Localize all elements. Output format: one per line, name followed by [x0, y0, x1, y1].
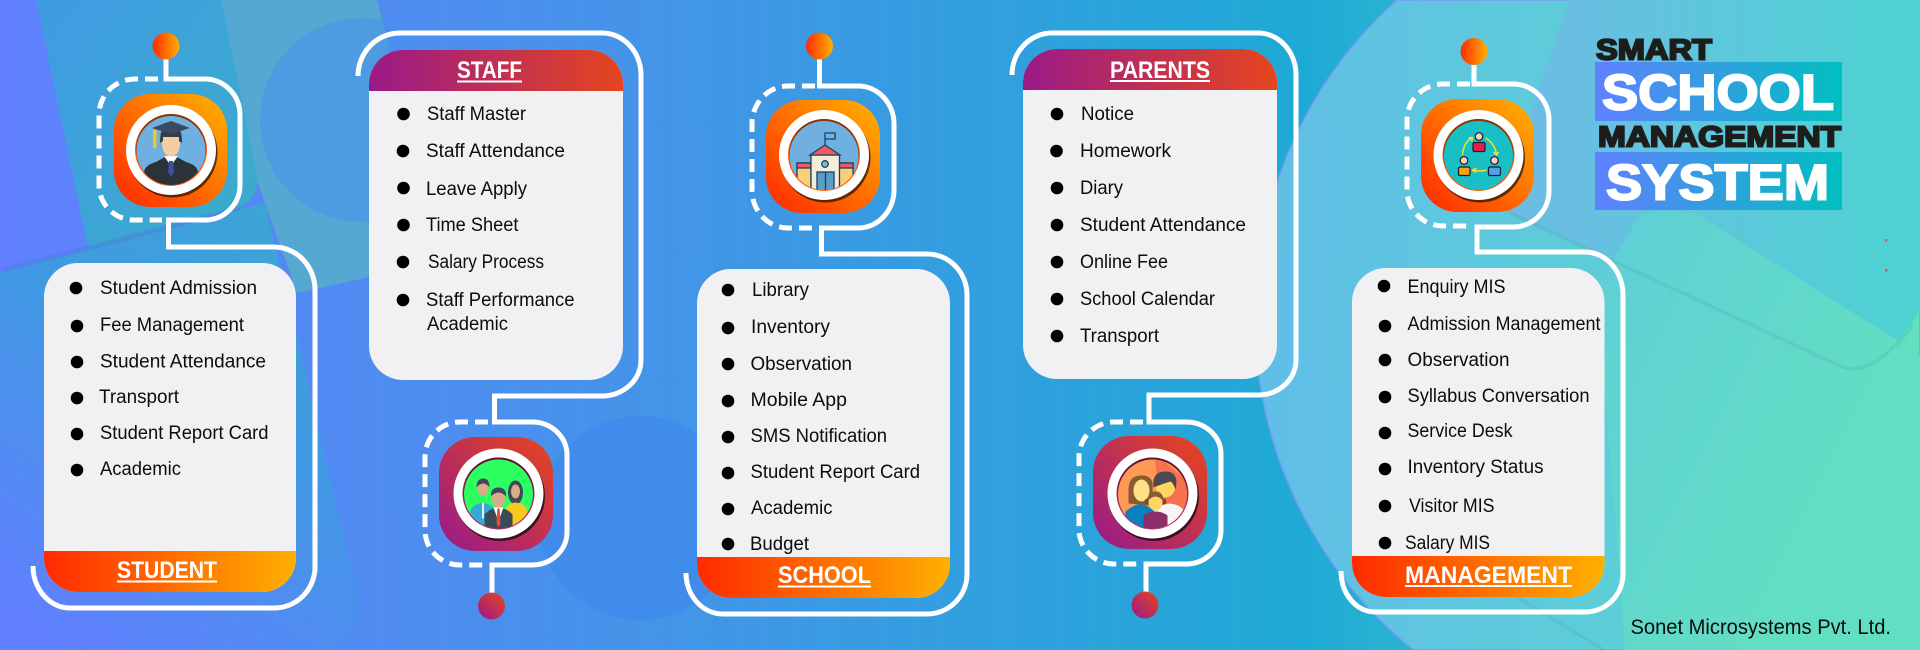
connector dot: management: [1460, 38, 1488, 65]
list: school: Library: [752, 280, 809, 301]
list: student: Transport: [99, 387, 180, 408]
icon: parents family: [1093, 436, 1207, 549]
list: parents: School Calendar: [1080, 289, 1216, 310]
connector: staff: [358, 33, 641, 600]
panel: management: [1341, 38, 1623, 612]
list: staff: Academic: [427, 314, 508, 335]
list: school: Inventory: [751, 317, 831, 338]
credit text: Sonet Microsystems Pvt. Ltd.: [1630, 616, 1891, 639]
list: management: Service Desk: [1408, 421, 1513, 442]
connector: parents: [1012, 33, 1296, 600]
title: smart school management system: SYSTEM: [1606, 154, 1829, 210]
list: parents: Transport: [1080, 326, 1160, 347]
list: parents: Homework: [1080, 141, 1171, 162]
footer band: student: [44, 551, 296, 592]
icon: school building: [766, 100, 880, 213]
list: staff: [397, 104, 574, 335]
panel: staff: [358, 33, 641, 620]
heading: school: SCHOOL: [778, 562, 871, 589]
title: smart school management system: SMART: [1596, 34, 1712, 66]
card: management: [1352, 268, 1604, 597]
list: student: Student Admission: [100, 278, 257, 299]
footer band: management: [1352, 556, 1604, 597]
heading: student: STUDENT: [117, 557, 217, 584]
header band: staff: [369, 50, 623, 91]
connector dot: staff: [478, 592, 505, 620]
icon: student graduate: [114, 94, 227, 207]
list: school: Academic: [751, 498, 832, 519]
list: school: Observation: [750, 354, 852, 375]
list: school: Mobile App: [750, 390, 847, 411]
list: student: Student Attendance: [100, 352, 266, 372]
panel: parents: [1012, 33, 1296, 618]
card: school: [697, 269, 950, 598]
list: management: Observation: [1408, 350, 1510, 371]
list: parents: Student Attendance: [1080, 215, 1246, 236]
icon: staff group: [439, 437, 553, 551]
list: student: Fee Management: [100, 315, 245, 336]
list: staff: Staff Master: [427, 104, 527, 125]
connector dot: student: [152, 32, 180, 60]
list: student: Student Report Card: [100, 423, 268, 444]
header band: parents: [1023, 49, 1277, 90]
list: management: Visitor MIS: [1409, 496, 1494, 517]
panel: student: [33, 32, 315, 608]
card: student: [44, 263, 296, 592]
list: management: Admission Management: [1408, 314, 1601, 335]
connector dot: school: [806, 32, 833, 60]
connector: student: [33, 46, 315, 608]
list: parents: [1050, 104, 1246, 347]
heading: staff: STAFF: [457, 57, 522, 84]
title: smart school management system: [1595, 34, 1842, 210]
list: management: Inventory Status: [1408, 457, 1544, 478]
title: smart school management system: MANAGEMENT: [1598, 122, 1841, 154]
list: school: SMS Notification: [750, 426, 887, 447]
icon: management cycle: [1421, 99, 1534, 212]
list: staff: Leave Apply: [426, 179, 527, 200]
connector: management: [1341, 52, 1623, 612]
list: staff: Staff Attendance: [426, 141, 565, 162]
heading: parents: PARENTS: [1110, 57, 1210, 84]
heading: management: MANAGEMENT: [1405, 562, 1572, 589]
list: management: [1378, 277, 1601, 554]
list: school: [722, 280, 920, 555]
list: staff: Time Sheet: [426, 215, 519, 236]
connector dot: parents: [1132, 592, 1158, 618]
title: smart school management system: SCHOOL: [1602, 64, 1834, 120]
list: staff: Staff Performance: [426, 290, 574, 311]
connector: school: [686, 46, 967, 614]
list: school: Budget: [750, 534, 810, 555]
list: school: Student Report Card: [750, 462, 920, 483]
panel: school: [686, 32, 967, 614]
card: parents: [1023, 49, 1277, 379]
list: parents: Notice: [1081, 104, 1134, 125]
list: management: Salary MIS: [1405, 533, 1490, 554]
list: student: Academic: [100, 459, 181, 480]
card: staff: [369, 50, 623, 380]
list: management: Enquiry MIS: [1408, 277, 1506, 298]
list: staff: Salary Process: [428, 252, 544, 273]
list: student: [70, 278, 268, 480]
list: parents: Diary: [1080, 178, 1123, 199]
list: parents: Online Fee: [1080, 252, 1168, 273]
footer band: school: [697, 557, 950, 598]
list: management: Syllabus Conversation: [1408, 386, 1590, 407]
